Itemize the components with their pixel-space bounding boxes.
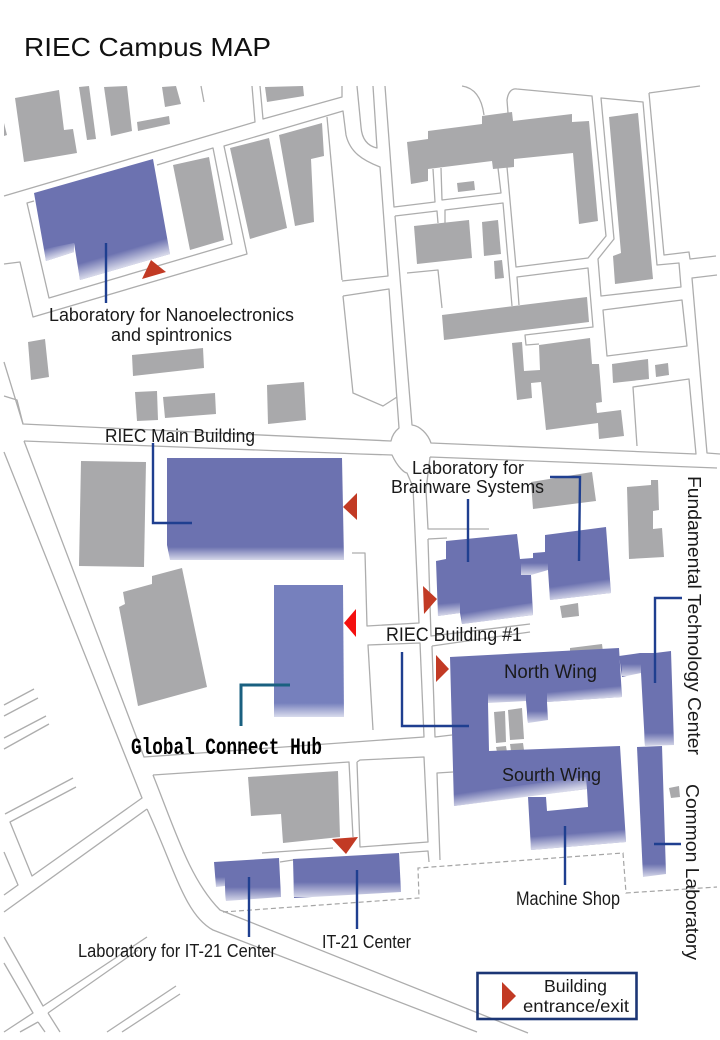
title: RIEC Campus MAP [24,32,271,62]
entrance markers [142,260,449,854]
building: Laboratory for Brainware Systems [436,527,611,624]
gray surrounding buildings [4,86,680,843]
label: Laboratory for Brainware Systems: Brainware Systems [391,476,544,497]
building: RIEC Main Building [167,458,344,560]
building: RIEC Building #1 North and South Wings [450,648,626,850]
legend [478,973,636,1019]
label: Laboratory for Nanoelectronics and spintronics: Laboratory for Nanoelectronics [49,304,294,325]
label: Laboratory for Nanoelectronics and spintronics: and spintronics [111,324,232,345]
label: Laboratory for IT-21 Center: Laboratory for IT-21 Center [78,941,276,961]
title clipping band [0,58,720,78]
label: RIEC Main Building: RIEC Main Building [105,425,255,446]
label: Common Laboratory: Common Laboratory [682,784,703,961]
building: Laboratory for IT-21 Center [214,858,281,901]
label: RIEC Building #1: RIEC Building #1 [386,625,522,646]
label: IT-21 Center: IT-21 Center [322,931,411,952]
building: Laboratory for Nanoelectronics and spintronics [34,159,170,280]
label: Laboratory for Nanoelectronics and spintronics [49,304,294,345]
building: IT-21 Center [293,853,401,898]
label: Global Connect Hub: Global Connect Hub [131,735,322,761]
legend: Building [544,976,607,996]
label: Sourth Wing: Sourth Wing [502,764,601,785]
label: Machine Shop: Machine Shop [516,888,620,910]
label: North Wing: North Wing [504,661,597,683]
building: Common Laboratory [637,746,666,877]
legend: entrance/exit [523,996,629,1016]
label: Fundamental Technology Center: Fundamental Technology Center [684,476,705,755]
building: Global Connect Hub [274,585,344,717]
leader line: Global Connect Hub [241,685,290,726]
label: Laboratory for Brainware Systems: Laboratory for [412,457,524,478]
label: Laboratory for Brainware Systems [391,457,544,497]
leader lines [106,243,682,937]
dashed campus boundary [223,853,717,912]
building: Fundamental Technology Center [619,651,674,746]
